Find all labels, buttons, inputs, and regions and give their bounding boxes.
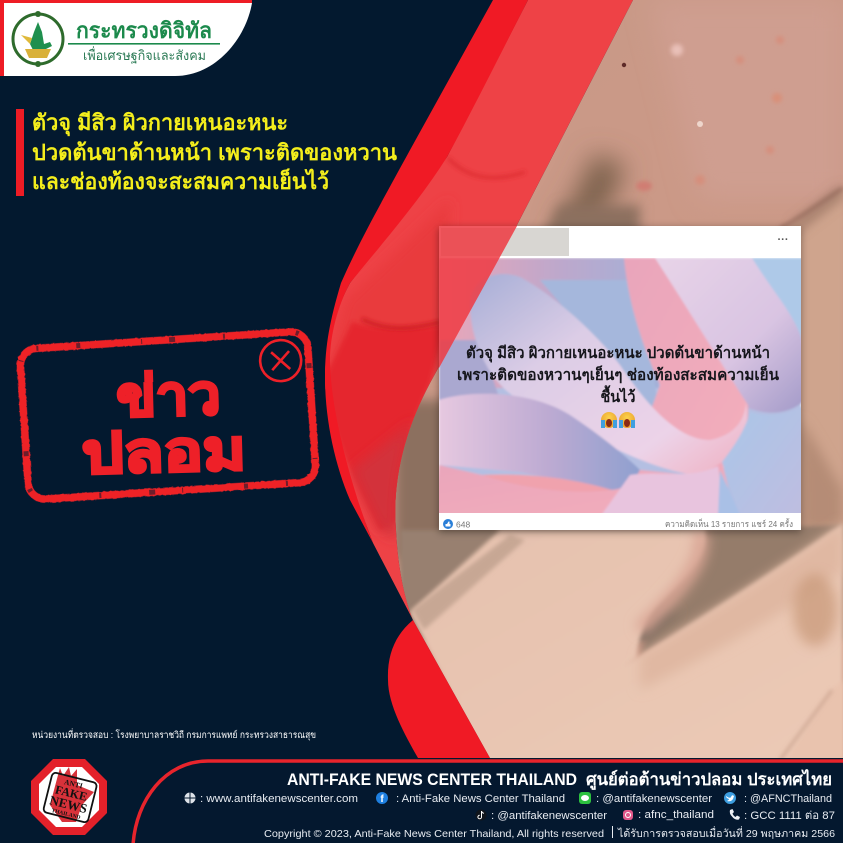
icon: line [579, 792, 591, 804]
stamp word: ข่าว [116, 363, 221, 428]
crying emoji pair [601, 412, 635, 428]
icon: tiktok [476, 810, 486, 820]
icon: facebook: f [380, 794, 384, 805]
anti-fake news badge [31, 759, 107, 835]
footer contact links: : Anti-Fake News Center Thailand [396, 793, 565, 805]
anti-fake news badge: NEWS [48, 792, 89, 816]
copyright line: ได้รับการตรวจสอบเมื่อวันที่ 29 พฤษภาคม 2566 [617, 826, 835, 840]
title: ปวดต้นขาด้านหน้า เพราะติดของหวาน [32, 140, 397, 165]
ministry emblem [13, 11, 63, 67]
like icon and count [443, 519, 470, 530]
copyright line [264, 826, 835, 840]
ministry tagline: เพื่อเศรษฐกิจและสังคม [83, 46, 206, 64]
fake news stamp [19, 331, 317, 500]
source agency note: หน่วยงานที่ตรวจสอบ : โรงพยาบาลราชวิถี กรมการแพทย์ กระทรวงสาธารณสุข [32, 728, 316, 741]
icon: facebook [376, 792, 388, 805]
icon: website [184, 792, 196, 804]
title: และช่องท้องจะสะสมความเย็นไว้ [32, 167, 329, 194]
anti-fake news badge: FAKE [54, 782, 89, 804]
stamp word [80, 362, 247, 485]
post background artwork [435, 258, 805, 517]
header logo panel [0, 0, 252, 76]
anti-fake news badge: ANTI [63, 777, 84, 791]
icon: phone [730, 809, 740, 820]
post background artwork: ชื้นไว้ [600, 385, 636, 406]
stamp word: ปลอม [81, 418, 247, 485]
footer contact links: : www.antifakenewscenter.com [200, 793, 358, 805]
icon: instagram [623, 810, 633, 820]
blurred profile block [441, 228, 569, 256]
red tint over card corner [439, 226, 517, 368]
copyright line: Copyright © 2023, Anti-Fake News Center Thailand, All rights reserved [264, 828, 604, 840]
footer heading: ANTI-FAKE NEWS CENTER THAILAND [287, 770, 577, 789]
post text: ตัวจุ มีสิว ผิวกายเหนอะหนะ ปวดต้นขาด้านหน้า [466, 344, 770, 363]
footer heading [287, 769, 832, 791]
footer contact links [184, 792, 835, 822]
footer panel [133, 761, 843, 843]
footer contact links: : @antifakenewscenter [491, 810, 607, 822]
photo: skin with acne and hand [396, 0, 843, 758]
footer contact links: : @antifakenewscenter [596, 793, 712, 805]
facebook post card [435, 226, 805, 530]
title: ตัวจุ มีสิว ผิวกายเหนอะหนะ [32, 110, 288, 137]
footer heading: ศูนย์ต่อต้านข่าวปลอม ประเทศไทย [586, 769, 832, 791]
footer contact links: : @AFNCThailand [744, 793, 832, 805]
footer contact links: : GCC 1111 ต่อ 87 [744, 810, 835, 822]
footer contact links: : afnc_thailand [638, 809, 714, 821]
comments and shares: ความคิดเห็น 13 รายการ แชร์ 24 ครั้ง [665, 518, 793, 529]
post menu dots: ··· [778, 234, 788, 246]
stamp x icon [259, 339, 302, 382]
title [16, 109, 397, 196]
like icon and count: 648 [456, 520, 470, 530]
post background artwork: เพราะติดของหวานๆเย็นๆ ช่องท้องสะสมความเย็น [457, 364, 779, 384]
ministry name: กระทรวงดิจิทัล [76, 18, 212, 43]
red translucent panel over lips [320, 0, 640, 640]
icon: twitter [724, 792, 736, 804]
anti-fake news badge: THAILAND [51, 808, 81, 821]
red solid band [325, 0, 528, 543]
red bottom blob [388, 620, 490, 758]
